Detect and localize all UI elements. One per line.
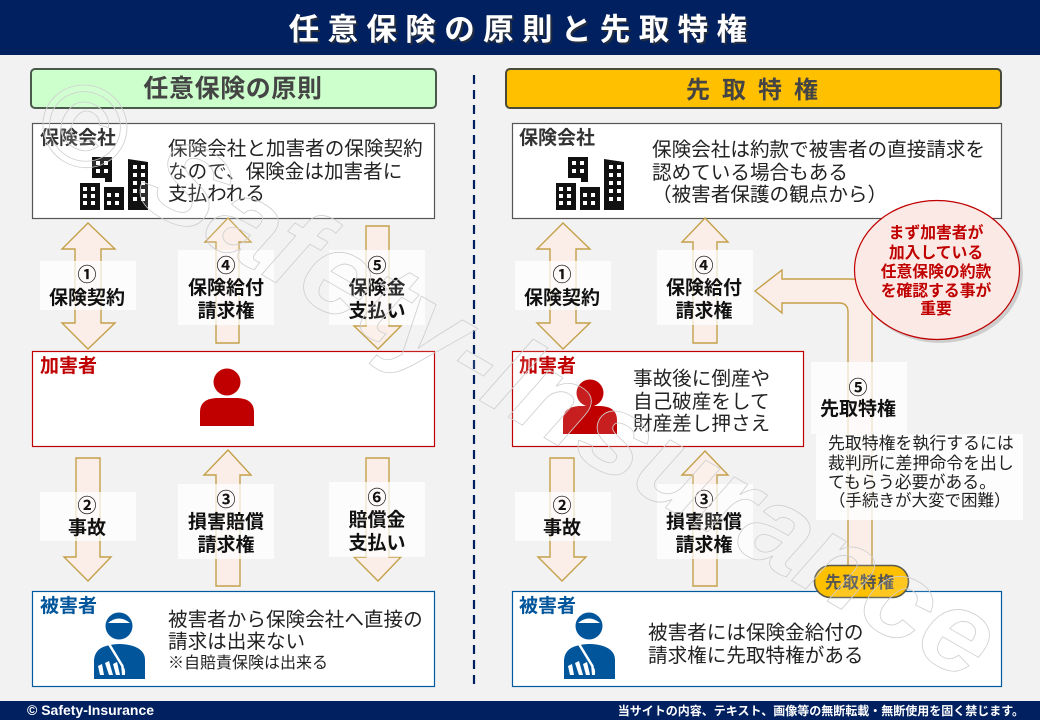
text block: 認めている場合もある [652, 162, 848, 184]
text block: 保険会社は約款で被害者の直接請求を [652, 139, 985, 161]
label 4 left: 請求権 [197, 299, 255, 322]
label 5 left: 支払い [348, 300, 406, 322]
text block [652, 139, 985, 206]
label 5 right [811, 362, 907, 434]
label 3 right: 損害賠償 [666, 511, 742, 533]
note: 裁判所に差押命令を出し [828, 454, 1014, 473]
panel: victim right [512, 592, 1002, 686]
text block: 財産差し押さえ [633, 413, 770, 435]
label 3 right [657, 484, 753, 559]
arrow 1 right [537, 223, 590, 349]
panel: insurer right [512, 124, 1002, 218]
label 6 left: ⑥ [367, 487, 387, 509]
text block: 被害者から保険会社へ直接の [168, 609, 423, 631]
label 2 right [515, 492, 611, 541]
label 3 left [178, 484, 274, 559]
panel: victim left [32, 592, 434, 686]
heading: right panel: 先取特権 [686, 77, 830, 104]
note: 先取特権を執行するには [828, 434, 1014, 453]
text block: 自己破産をして [633, 391, 770, 413]
label 4 right: 請求権 [675, 299, 733, 322]
label 2 right: 事故 [543, 517, 581, 539]
arrow 2 left [64, 458, 111, 581]
label 1 left: 保険契約 [49, 287, 125, 309]
panel: perpetrator left [32, 352, 434, 446]
callout circle: 重要 [920, 300, 952, 318]
arrow 4 right [682, 218, 728, 343]
label 2 left [40, 492, 136, 541]
label 6 left: 支払い [348, 532, 406, 554]
text block: 請求は出来ない [168, 631, 305, 653]
label 4 left: 保険給付 [188, 277, 264, 299]
text block: ※自賠責保険は出来る [168, 654, 328, 672]
panel: perpetrator right [512, 352, 804, 446]
center divider [473, 75, 475, 688]
label 4 left [178, 250, 274, 325]
label: insurer: 保険会社 [519, 127, 595, 149]
label 1 right [515, 261, 611, 310]
icon: buildings [80, 157, 148, 210]
label: victim: 被害者 [519, 595, 576, 617]
arrow 3 left [204, 450, 251, 586]
text block [648, 622, 864, 667]
arrow 6 left [354, 458, 401, 581]
text block: なので、保険金は加害者に [168, 161, 402, 183]
text block [168, 609, 423, 672]
label 4 right: 保険給付 [666, 277, 742, 299]
text block [168, 138, 423, 205]
pill: priority right [814, 566, 908, 598]
label 3 left: ③ [216, 489, 236, 511]
title banner: 任意保険の原則と先取特権 [291, 15, 757, 49]
label 3 left: 損害賠償 [188, 511, 264, 533]
watermark: © Safety-Insurance [13, 47, 1021, 705]
callout circle: を確認する事が [881, 281, 991, 300]
label 4 right [657, 250, 753, 325]
icon: injured person [94, 612, 145, 679]
label 3 left: 請求権 [197, 533, 255, 556]
text block: 保険会社と加害者の保険契約 [168, 138, 423, 160]
label 5 right: 先取特権 [820, 398, 896, 420]
label 2 right: ② [552, 495, 572, 517]
footer [0, 701, 1040, 720]
text block [633, 368, 770, 435]
label 1 left: ① [77, 264, 97, 286]
pill: priority right: 先取特権 [825, 573, 895, 592]
heading: right panel [506, 69, 1001, 108]
arrow 4 left [205, 218, 251, 343]
title banner [0, 0, 1040, 55]
label 4 left: ④ [216, 255, 236, 277]
label 2 left: 事故 [68, 517, 106, 539]
label 1 right: 保険契約 [524, 287, 600, 309]
text block: 事故後に倒産や [633, 368, 770, 390]
label 3 right: ③ [694, 489, 714, 511]
footer: © Safety-Insurance [27, 702, 154, 718]
arrow 3 right [682, 451, 728, 586]
heading: left panel [31, 69, 436, 108]
label 1 left [40, 261, 136, 310]
heading: left panel: 任意保険の原則 [143, 75, 323, 103]
label 5 left [329, 250, 425, 325]
icon: buildings [556, 157, 624, 210]
label 5 left: 保険金 [348, 277, 406, 299]
label 1 right: ① [552, 264, 572, 286]
arrow 2 right [538, 458, 586, 581]
label 6 left: 賠償金 [348, 509, 406, 531]
arrow 1 left [62, 223, 115, 349]
icon: person [200, 368, 254, 426]
callout circle [854, 200, 1023, 343]
label 3 right: 請求権 [675, 533, 733, 556]
footer: 当サイトの内容、テキスト、画像等の無断転載・無断使用を固く禁じます。 [618, 703, 1024, 718]
callout circle: まず加害者が [889, 223, 984, 242]
label 2 left: ② [77, 495, 97, 517]
note: てもらう必要がある。 [828, 473, 996, 492]
text block: 被害者には保険金給付の [648, 622, 864, 644]
text block: 支払われる [168, 183, 265, 205]
label: insurer: 保険会社 [40, 127, 116, 149]
icon: person [563, 380, 617, 434]
label 6 left [329, 482, 425, 557]
title banner: 任意保険の原則と先取特権 [289, 13, 755, 47]
callout circle: 加入している [889, 244, 983, 262]
callout circle: 任意保険の約款 [881, 263, 991, 281]
label 4 right: ④ [694, 255, 714, 277]
label 5 left: ⑤ [367, 255, 387, 277]
label 5 right: ⑤ [848, 377, 868, 399]
panel: insurer left [32, 124, 434, 218]
text block: 請求権に先取特権がある [648, 645, 864, 667]
label: perpetrator: 加害者 [519, 355, 576, 377]
icon: injured person [564, 612, 615, 679]
arrow 5 left [354, 226, 401, 349]
note: （手続きが大変で困難） [829, 491, 1010, 510]
arrow 5 bent right [755, 270, 872, 566]
note [816, 434, 1023, 520]
text block: （被害者保護の観点から） [652, 184, 887, 206]
label: perpetrator: 加害者 [40, 355, 97, 377]
label: victim: 被害者 [40, 595, 97, 617]
